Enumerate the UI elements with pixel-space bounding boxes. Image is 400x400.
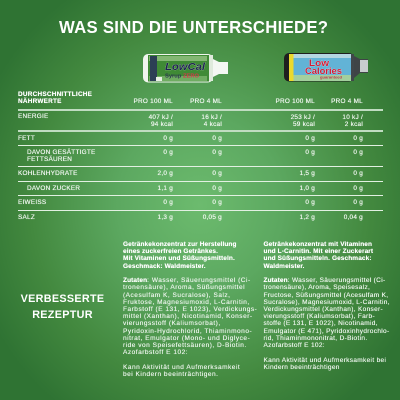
row: davon gesättigte Fettsäuren: FETTSÄUREN (27, 156, 72, 163)
table header label: DURCHSCHNITTLICHE (18, 91, 92, 98)
infographic canvas: 4 kcal (204, 121, 222, 128)
ingredients: right product (264, 241, 390, 371)
infographic canvas: 0 g (212, 149, 222, 156)
ingredients: left product: Zutaten: Wasser, Säuerungsmittel (Ci- (123, 277, 251, 284)
infographic canvas: 0 g (163, 149, 173, 156)
infographic canvas: 0 g (305, 199, 315, 206)
ingredients: right product: und Süßungsmitteln. Geschmack: (264, 255, 372, 262)
infographic canvas: 0 g (353, 135, 363, 142)
ingredients: right product: stoffe (E 131, E 1022), Nicotinamid, (264, 320, 378, 327)
infographic canvas: PRO 4 ML (190, 98, 222, 105)
infographic canvas: 0 g (305, 149, 315, 156)
ingredients: left product: (Acesulfam K, Sucralose), Salz, (123, 292, 231, 299)
infographic canvas: 0,05 g (203, 214, 222, 221)
product: blue Low Calories bottle: guaranteed (320, 74, 343, 80)
ingredients: left product: vierungsstoff (Kaliumsorbat), (123, 320, 221, 327)
ingredients: left product: tronensäure), Aroma, Süßungsmittel (123, 284, 245, 291)
ingredients: right product: rid, Thiaminmononitrat, D-Biotin. (264, 335, 367, 342)
ingredients: right product: vierungsstoff (Kaliumsorbat), Farb- (264, 313, 375, 320)
side heading (20, 293, 104, 321)
infographic canvas: 1,5 g (300, 170, 315, 177)
ingredients: right product: Sucralose), Magnesiumoxid, L-Carnitin, (264, 299, 390, 306)
infographic canvas: PRO 4 ML (331, 98, 363, 105)
product: blue Low Calories bottle: Low (309, 58, 330, 68)
infographic canvas: 0,04 g (344, 214, 363, 221)
infographic canvas: 1,1 g (158, 185, 173, 192)
product: blue Low Calories bottle (284, 53, 368, 82)
ingredients: left product (123, 241, 257, 378)
ingredients: left product: bei Kindern beeinträchtigen. (123, 371, 219, 378)
ingredients: left product: Geschmack: Waldmeister. (123, 263, 206, 270)
table header label (18, 91, 92, 105)
infographic canvas: 0 g (212, 170, 222, 177)
infographic canvas: 1,0 g (300, 185, 315, 192)
product: green LowCal bottle: Syrup ZERO (165, 74, 200, 80)
infographic canvas: 407 kJ / (149, 114, 173, 120)
ingredients: right product: Kindern beeinträchtigen (264, 364, 340, 371)
ingredients: left product: Kann Aktivität und Aufmerksamkeit (123, 364, 240, 371)
product: green LowCal bottle: LowCal (165, 62, 205, 73)
ingredients: left product: nitrat, Emulgator (Mono- und Diglyce- (123, 335, 250, 342)
side heading: VERBESSERTE (21, 293, 104, 305)
ingredients: left product: Farbstoff (E 131, E 1023), Verdickungs- (123, 306, 257, 313)
ingredients: left product: eines zuckerfreien Getränkes. (123, 248, 218, 255)
ingredients: right product: Emulgator (E 471), Pyridoxinhydrochlo- (264, 328, 389, 335)
ingredients: right product: und L-Carnitin. Mit einer Zuckerart (264, 248, 373, 255)
column headers: PRO 100 ML (134, 98, 173, 105)
row: Fett: FETT (18, 135, 35, 142)
ingredients: left product: Fruktose, Magnesiumoxid, L-Carnitin, (123, 299, 250, 306)
ingredients: left product: Mit Vitaminen und Süßungsmitteln. (123, 255, 235, 262)
ingredients: right product: Verdickungsmittel (Xanthan), Konser- (264, 306, 383, 313)
ingredients: left product: mittel (Xanthan), Nicotinamid, Konser- (123, 313, 253, 320)
infographic canvas: 10 kJ / (342, 114, 363, 120)
infographic canvas: 0 g (163, 135, 173, 142)
ingredients: left product: Getränkekonzentrat zur Herstellung (123, 241, 237, 248)
infographic canvas: 1,3 g (158, 214, 173, 221)
table header label: NÄHRWERTE (18, 98, 62, 105)
infographic canvas: 0 g (353, 185, 363, 192)
infographic canvas: 0 g (353, 170, 363, 177)
row: Energie: ENERGIE (18, 113, 49, 120)
title: WAS SIND DIE UNTERSCHIEDE? (59, 16, 328, 36)
ingredients: right product: Getränkekonzentrat mit Vitaminen (264, 241, 372, 248)
side heading: REZEPTUR (32, 309, 93, 321)
ingredients: right product: Azofarbstoff E 102: (264, 342, 325, 349)
infographic canvas: 0 g (212, 135, 222, 142)
infographic canvas: 59 kcal (293, 121, 315, 128)
ingredients: left product: Azofarbstoff E 102: (123, 349, 188, 356)
ingredients: right product: Zutaten: Wasser, Säuerungsmittel (Ci- (264, 277, 385, 284)
ingredients: right product: tronensäure), Aroma, Speisesalz, (264, 284, 370, 291)
infographic canvas: 16 kJ / (201, 114, 222, 120)
infographic canvas: 2,0 g (158, 170, 173, 177)
infographic canvas: 1,2 g (300, 214, 315, 221)
ingredients: right product: Fructose, Süßungsmittel (Acesulfam K, (264, 292, 388, 299)
infographic canvas: 0 g (212, 199, 222, 206)
product: blue Low Calories bottle: Calories (305, 66, 342, 76)
row: Kohlenhydrate: KOHLENHYDRATE (18, 170, 78, 177)
infographic canvas: 0 g (212, 185, 222, 192)
infographic canvas: 253 kJ / (291, 114, 315, 120)
row: davon gesättigte Fettsäuren: DAVON GESÄTTIGTE (27, 149, 96, 156)
infographic canvas: 94 kcal (151, 121, 173, 128)
row: Salz: SALZ (18, 214, 35, 221)
infographic canvas: 0 g (353, 199, 363, 206)
ingredients: right product: Waldmeister. (264, 263, 305, 270)
infographic canvas: 0 g (163, 199, 173, 206)
ingredients: left product: Pyridoxin-Hydrochlorid, Thiaminmono- (123, 328, 252, 335)
product: green LowCal bottle (143, 54, 228, 82)
infographic canvas: 2 kcal (345, 121, 363, 128)
ingredients: left product: ride von Speisefettsäuren), D-Biotin. (123, 342, 247, 349)
infographic canvas: PRO 100 ML (276, 98, 315, 105)
row: davon Zucker: DAVON ZUCKER (27, 185, 80, 192)
infographic canvas: 0 g (305, 135, 315, 142)
ingredients: right product: Kann Aktivität und Aufmerksamkeit bei (264, 356, 386, 364)
infographic canvas: 0 g (353, 149, 363, 156)
row: Eiweiss: EIWEISS (18, 199, 46, 206)
row: davon gesättigte Fettsäuren (27, 148, 96, 163)
